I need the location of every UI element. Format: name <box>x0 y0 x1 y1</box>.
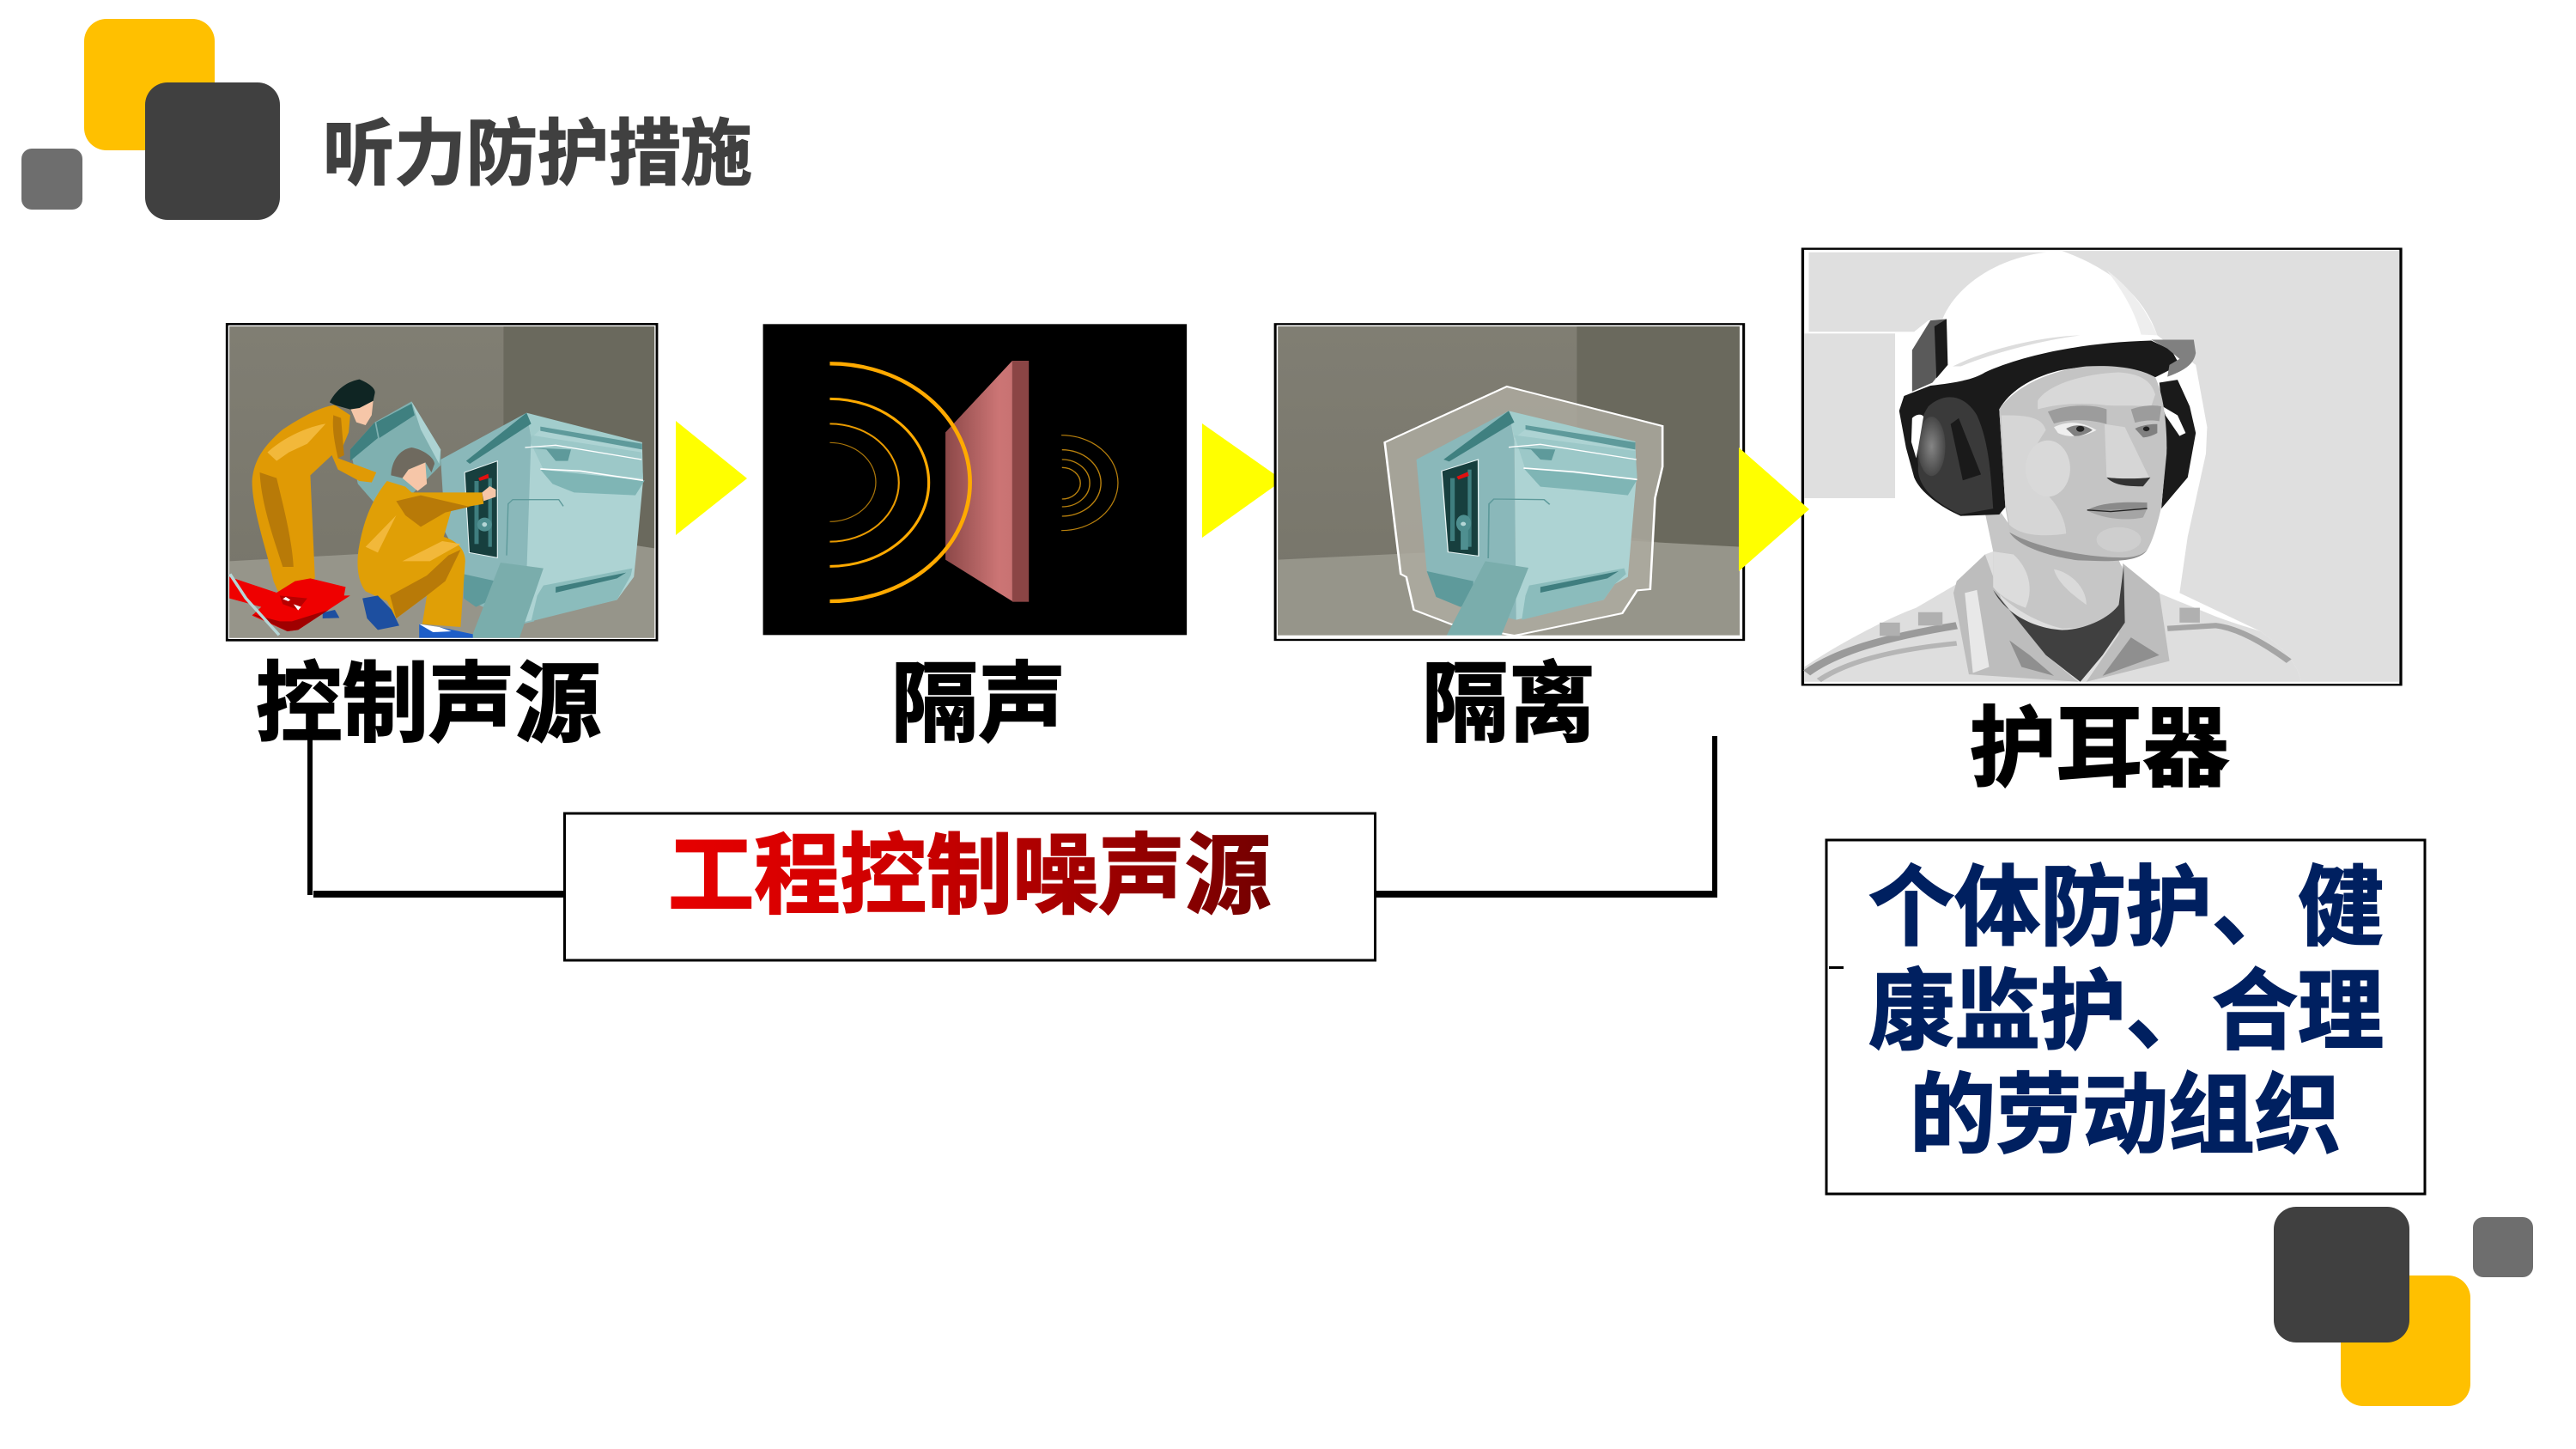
text: personal protection lines <box>1868 859 2384 1165</box>
label: ear protectors: 护耳器 <box>1970 700 2229 798</box>
icon: ramp plate <box>1447 561 1528 636</box>
box: personal protection <box>1826 840 2425 1194</box>
text: personal protection lines: 康监护、合理 <box>1868 963 2384 1061</box>
icon: ramp plate <box>471 563 544 638</box>
arrow 1 <box>676 421 747 535</box>
label: control noise source: 控制声源 <box>256 655 601 753</box>
icon: machine body <box>440 413 645 624</box>
panel: isolation enclosure illustration <box>1275 324 1744 640</box>
logo: top left squares <box>21 19 280 220</box>
bracket connector: left <box>307 739 564 898</box>
icon: barrier wall <box>945 361 1029 602</box>
label: sound insulation: 隔声 <box>891 655 1066 753</box>
arrow 2 <box>1202 423 1283 538</box>
text: personal protection lines: 个体防护、健 <box>1868 859 2384 957</box>
icon: machine duct <box>350 401 440 507</box>
icon: standing worker <box>252 380 376 618</box>
label: isolation: 隔离 <box>1422 655 1595 753</box>
logo: bottom right squares <box>2274 1207 2533 1406</box>
icon: red toolbox <box>229 574 350 635</box>
background tone <box>1804 251 2399 682</box>
title: 听力防护措施 <box>323 113 752 194</box>
box: engineering control <box>565 813 1376 960</box>
icon: control panel <box>465 461 497 557</box>
icon: control panel <box>1442 460 1479 556</box>
icon: transmitted sound waves <box>1061 435 1118 531</box>
icon: undershirt <box>1993 566 2125 682</box>
panel: sound barrier illustration <box>763 324 1187 635</box>
icon: face <box>1999 366 2166 561</box>
icon: ear defender <box>1899 319 2196 516</box>
panel: control noise source illustration <box>227 324 657 640</box>
icon: incident sound waves <box>829 363 970 601</box>
arrow 3 <box>1739 447 1809 571</box>
panel: worker with ear defenders <box>1802 249 2401 685</box>
icon: shirt <box>1804 550 2301 682</box>
icon: enclosure <box>1385 387 1662 636</box>
icon: neck <box>1985 513 2123 629</box>
icon: kneeling worker <box>357 447 495 638</box>
text: personal protection lines: 的劳动组织 <box>1910 1067 2341 1165</box>
bracket connector: right <box>1376 736 1717 898</box>
icon: machine <box>1417 411 1637 620</box>
icon: helmet <box>1953 270 2157 367</box>
text: engineering control of noise source: 工程控制噪声源 <box>668 827 1271 925</box>
